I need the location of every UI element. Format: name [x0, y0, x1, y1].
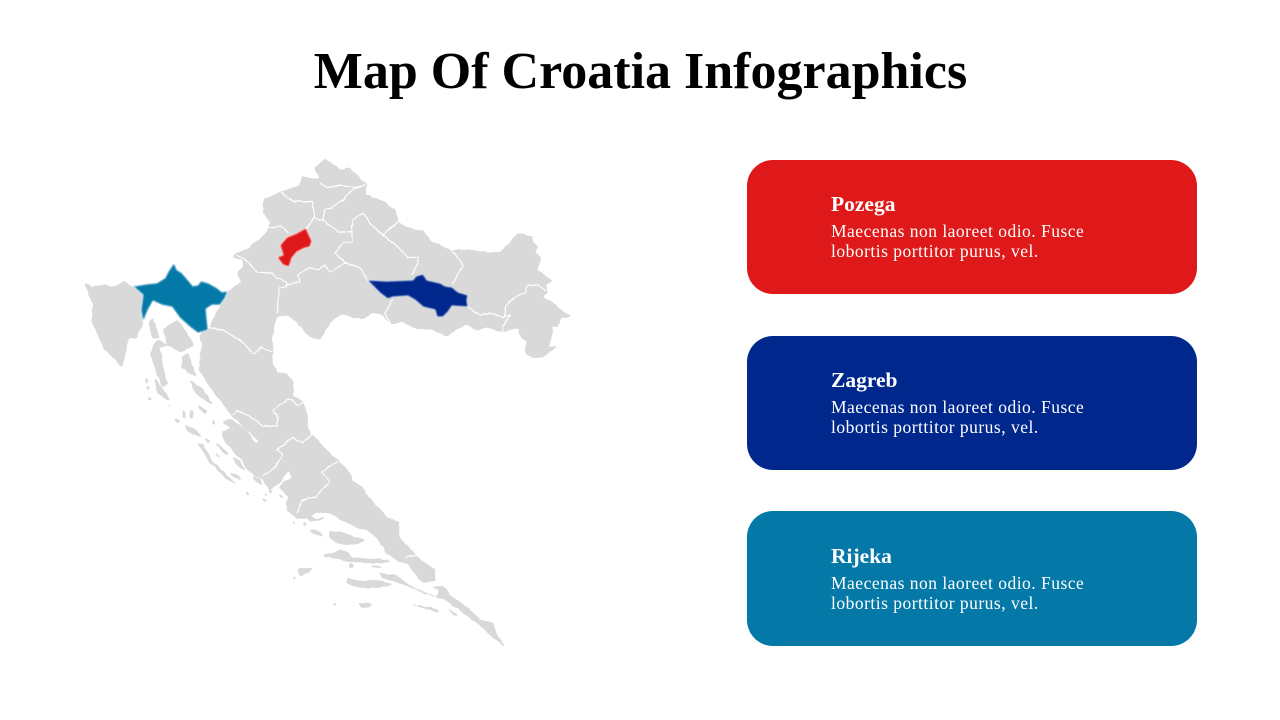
text block	[831, 573, 1084, 613]
title: Map Of Croatia Infographics	[314, 43, 967, 100]
heading: Zagreb	[831, 368, 898, 392]
text block: Maecenas non laoreet odio. Fusce	[831, 221, 1084, 241]
text block: Maecenas non laoreet odio. Fusce	[831, 397, 1084, 417]
region: Pozega (red)	[277, 228, 312, 267]
islands	[145, 318, 506, 647]
text block	[831, 397, 1084, 437]
text block: Maecenas non laoreet odio. Fusce	[831, 573, 1084, 593]
text block: lobortis porttitor purus, vel.	[831, 241, 1039, 261]
Istria	[84, 281, 143, 367]
region: Rijeka (teal)	[130, 263, 228, 333]
heading: Rijeka	[831, 544, 892, 568]
text block: lobortis porttitor purus, vel.	[831, 417, 1039, 437]
text block	[831, 221, 1084, 261]
card: Pozega	[747, 160, 1197, 294]
region: Zagreb (navy)	[367, 274, 468, 317]
card: Zagreb	[747, 336, 1197, 470]
county borders	[208, 183, 545, 558]
card: Rijeka	[747, 511, 1197, 646]
text block: lobortis porttitor purus, vel.	[831, 593, 1039, 613]
mainland	[84, 159, 572, 647]
heading: Pozega	[831, 192, 895, 216]
